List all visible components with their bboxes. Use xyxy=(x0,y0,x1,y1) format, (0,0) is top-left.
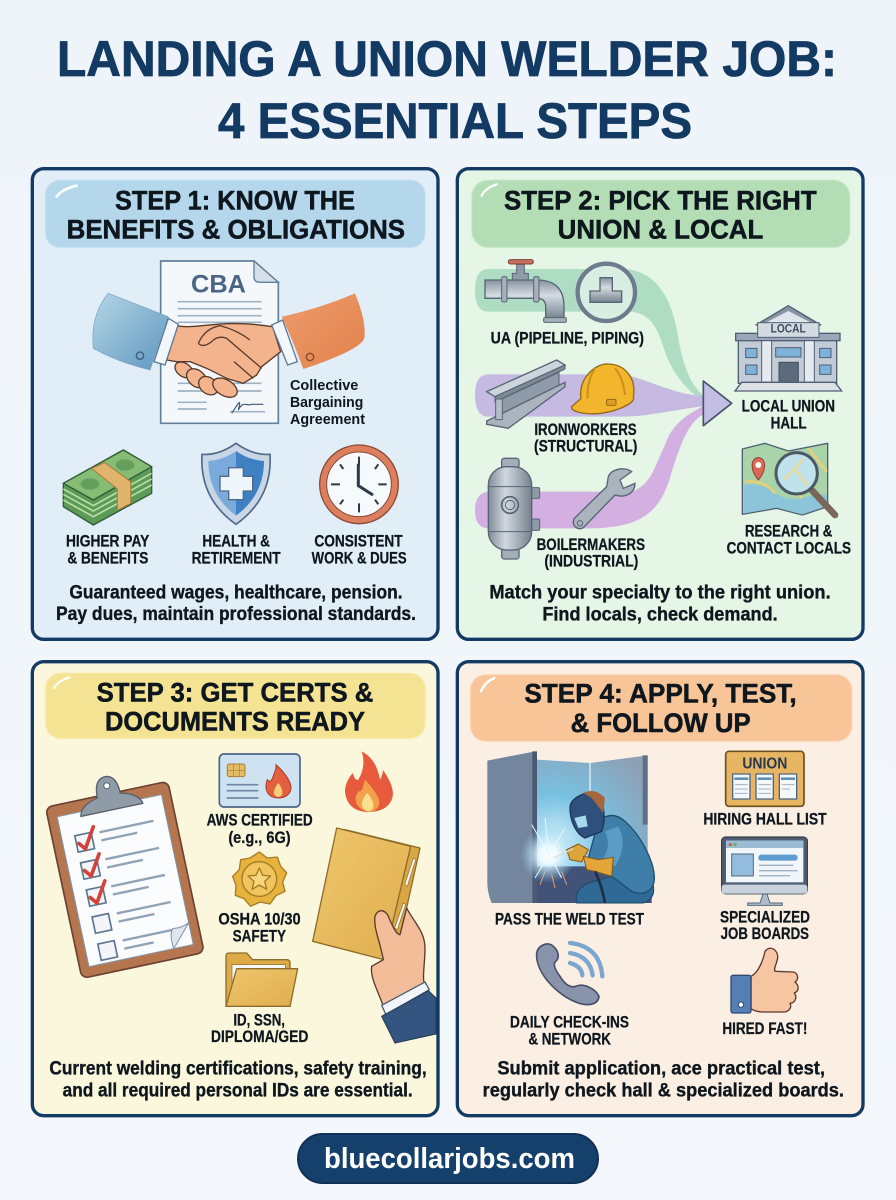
step 1 summary: Pay dues, maintain professional standards. xyxy=(56,603,416,625)
labels: boilermakers: (INDUSTRIAL) xyxy=(544,552,638,571)
step 4 heading band: STEP 4: APPLY, TEST, xyxy=(524,678,797,708)
title: 4 ESSENTIAL STEPS xyxy=(218,93,692,149)
label: specialized job boards xyxy=(720,907,810,943)
label: higher pay: HIGHER PAY xyxy=(66,532,150,551)
labels: ironworkers: (STRUCTURAL) xyxy=(534,437,637,456)
icon: local union hall building xyxy=(735,306,842,391)
step 2 summary xyxy=(489,581,831,626)
caption: collective bargaining agreement: Bargaining xyxy=(290,395,363,411)
icon: thumbs up xyxy=(731,948,798,1013)
step 2 summary: Find locals, check demand. xyxy=(542,604,778,626)
label: consistent work and dues: WORK & DUES xyxy=(312,548,407,567)
title: LANDING A UNION WELDER JOB: xyxy=(57,31,837,87)
label: OSHA: SAFETY xyxy=(233,926,287,945)
icon: hard hat xyxy=(572,364,634,414)
label: specialized job boards: SPECIALIZED xyxy=(720,907,810,926)
step 4 summary: Submit application, ace practical test, xyxy=(497,1058,825,1080)
icon: map with magnifier xyxy=(742,443,835,515)
icon: computer job board xyxy=(722,837,807,905)
label: specialized job boards: JOB BOARDS xyxy=(721,924,809,943)
label: AWS certified xyxy=(207,811,313,847)
label: local union hall: LOCAL UNION xyxy=(742,397,835,416)
icon: steel I-beam xyxy=(487,360,565,428)
labels: ironworkers: IRONWORKERS xyxy=(534,420,637,439)
step 2 summary: Match your specialty to the right union. xyxy=(489,581,831,603)
step 3 summary: and all required personal IDs are essential. xyxy=(63,1079,413,1101)
icon: boiler tank xyxy=(488,458,540,559)
label: OSHA xyxy=(218,910,301,945)
step 1 summary: Guaranteed wages, healthcare, pension. xyxy=(69,581,403,603)
label: pass the weld test: PASS THE WELD TEST xyxy=(495,910,644,929)
icon: cash stack xyxy=(63,450,152,525)
label: health and retirement xyxy=(192,532,281,567)
icon: flame xyxy=(345,751,393,812)
icon: clipboard checklist xyxy=(42,764,204,978)
label: research and contact locals: RESEARCH & xyxy=(745,522,832,541)
step 1 summary xyxy=(56,581,416,625)
icon: pipe with valve xyxy=(485,260,566,322)
label: daily check-ins xyxy=(510,1012,629,1049)
label: UA: UA (PIPELINE, PIPING) xyxy=(491,328,644,347)
icon: certification card xyxy=(219,754,300,807)
caption: collective bargaining agreement xyxy=(290,378,365,428)
label: health and retirement: RETIREMENT xyxy=(192,548,281,567)
icon: welder in booth xyxy=(487,751,654,903)
icon: local union hall building: LOCAL xyxy=(771,322,806,336)
step 3 summary: Current welding certifications, safety training, xyxy=(49,1058,427,1080)
handshake xyxy=(93,293,365,401)
footer url pill: bluecollarjobs.com xyxy=(324,1143,575,1175)
panel: step 3 certs and documents xyxy=(32,662,438,1116)
label: hired fast: HIRED FAST! xyxy=(722,1019,807,1038)
label: ID SSN diploma: DIPLOMA/GED xyxy=(211,1027,308,1046)
step 4 summary xyxy=(483,1058,844,1101)
label: higher pay xyxy=(66,532,150,567)
step 4 heading band: & FOLLOW UP xyxy=(571,708,751,738)
icon: union hiring board: UNION xyxy=(742,756,787,773)
caption: collective bargaining agreement: Agreement xyxy=(290,412,365,428)
icon: union hiring board xyxy=(726,751,804,806)
label: local union hall xyxy=(742,397,835,432)
footer url pill xyxy=(298,1134,598,1183)
step 3 heading band: STEP 3: GET CERTS & xyxy=(97,677,373,707)
labels: boilermakers: BOILERMAKERS xyxy=(537,535,645,554)
icon: phone with signal xyxy=(537,943,602,1005)
icon: OSHA gold badge xyxy=(233,852,287,906)
label: health and retirement: HEALTH & xyxy=(202,532,270,551)
label: higher pay: & BENEFITS xyxy=(67,548,148,567)
label: hiring hall list: HIRING HALL LIST xyxy=(703,810,827,829)
icon: wrench xyxy=(573,469,635,529)
panel: step 1 benefits and obligations xyxy=(32,169,438,639)
step 1 heading band: STEP 1: KNOW THE xyxy=(115,185,355,215)
labels: ironworkers xyxy=(534,420,637,456)
icon: hand holding folder xyxy=(313,828,436,1043)
label: consistent work and dues xyxy=(312,532,407,567)
step 3 heading band xyxy=(45,673,425,739)
label: AWS certified: (e.g., 6G) xyxy=(228,828,291,847)
step 3 heading band: DOCUMENTS READY xyxy=(105,707,365,737)
label: OSHA: OSHA 10/30 xyxy=(218,910,301,929)
label: research and contact locals xyxy=(727,522,851,557)
step 1 heading band xyxy=(45,180,425,248)
step 2 heading band xyxy=(472,180,850,248)
panel: step 2 pick the right union xyxy=(457,169,863,639)
CBA document xyxy=(161,261,278,423)
CBA document: CBA xyxy=(191,271,246,299)
flow ribbons and arrow xyxy=(475,269,732,528)
step 4 heading band xyxy=(470,675,852,741)
label: daily check-ins: & NETWORK xyxy=(528,1030,612,1049)
icon: clock xyxy=(320,445,398,524)
icon: health shield xyxy=(202,443,270,524)
label: ID SSN diploma: ID, SSN, xyxy=(233,1010,285,1029)
panel: step 4 apply test follow up xyxy=(457,662,863,1116)
labels: boilermakers xyxy=(537,535,645,571)
label: AWS certified: AWS CERTIFIED xyxy=(207,811,313,830)
step 2 heading band: STEP 2: PICK THE RIGHT xyxy=(504,185,817,215)
label: research and contact locals: CONTACT LOCALS xyxy=(727,538,851,557)
label: daily check-ins: DAILY CHECK-INS xyxy=(510,1012,629,1031)
label: ID SSN diploma xyxy=(211,1010,308,1046)
step 4 summary: regularly check hall & specialized boards. xyxy=(483,1079,844,1101)
label: local union hall: HALL xyxy=(771,413,807,432)
icon: document folder xyxy=(226,953,298,1006)
title xyxy=(57,31,837,149)
icon: pipe fitting badge xyxy=(578,264,635,321)
label: consistent work and dues: CONSISTENT xyxy=(314,532,403,551)
step 2 heading band: UNION & LOCAL xyxy=(558,214,763,244)
step 1 heading band: BENEFITS & OBLIGATIONS xyxy=(67,214,405,244)
step 3 summary xyxy=(49,1058,427,1101)
caption: collective bargaining agreement: Collective xyxy=(290,378,358,394)
